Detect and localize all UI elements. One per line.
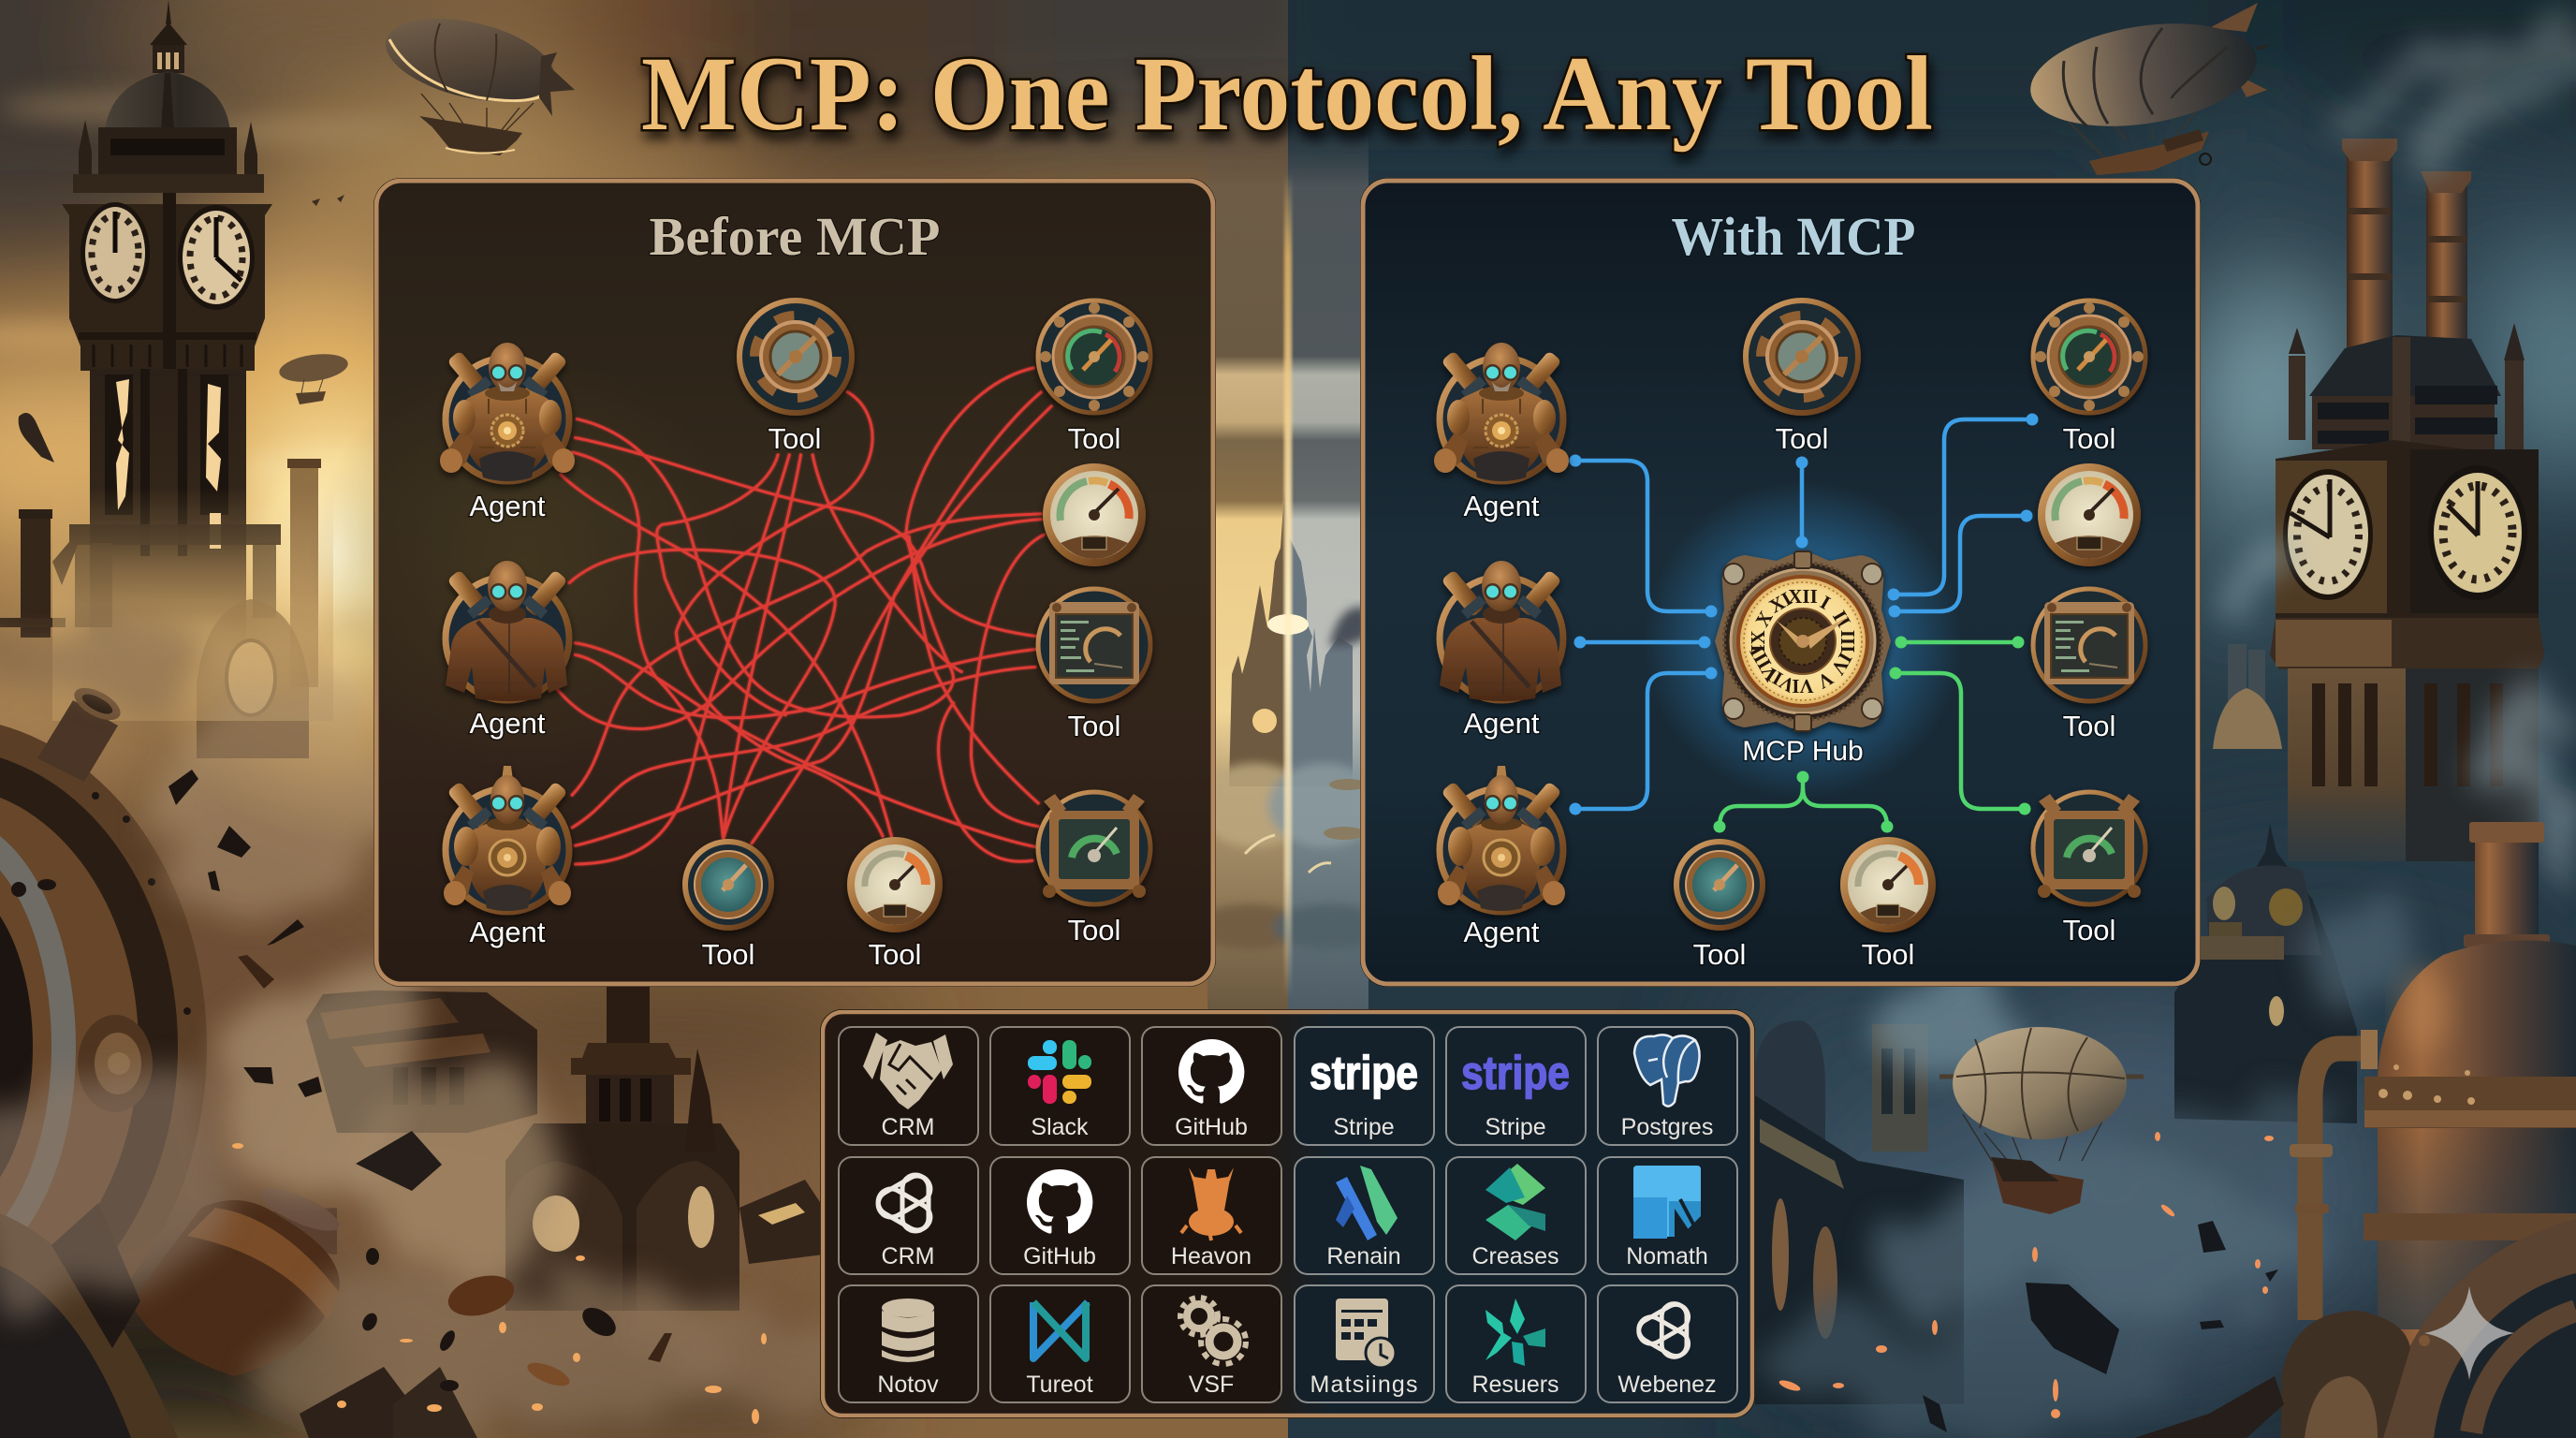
label: CRM	[882, 1114, 934, 1140]
agent icon 1	[1434, 343, 1569, 481]
MCP hub clock: XII	[1788, 585, 1818, 608]
tool label: Tool	[2063, 710, 2115, 742]
tool label: Tool	[702, 938, 754, 971]
label: Creases	[1471, 1243, 1559, 1269]
icon: Tureot	[1033, 1302, 1088, 1358]
cell: VSF	[1142, 1285, 1281, 1402]
cell: GitHub	[990, 1157, 1130, 1274]
label: GitHub	[1023, 1243, 1096, 1269]
cell: Postgres	[1598, 1027, 1737, 1145]
cell: Heavon	[1142, 1157, 1281, 1274]
cell: CRM knot	[839, 1157, 978, 1274]
tool label: Tool	[768, 422, 821, 455]
boiler and pipe	[2290, 822, 2576, 1438]
label: Stripe	[1485, 1114, 1546, 1140]
agent label 1: Agent	[469, 490, 546, 522]
left rusty cylinder and second wheel	[0, 1181, 344, 1438]
cell: Matsiings	[1295, 1285, 1434, 1402]
label: Nomath	[1626, 1243, 1708, 1269]
cell: Stripe purple	[1446, 1027, 1586, 1145]
MCP hub clock: V	[1813, 667, 1837, 694]
cell: GitHub	[1142, 1027, 1281, 1145]
lower clock	[197, 599, 309, 758]
MCP hub clock: VIII	[1745, 642, 1783, 685]
tool icon: dark gauge	[2033, 301, 2145, 413]
cell: Nomath	[1598, 1157, 1737, 1274]
icon: Renain	[1336, 1166, 1398, 1240]
agent icon 1	[440, 343, 575, 481]
agent label 2: Agent	[1463, 707, 1540, 740]
right big clock tower	[2270, 139, 2544, 861]
tool icon: square gauge	[1038, 792, 1150, 904]
tool label: Tool	[1068, 710, 1120, 742]
right lower cityscape	[1755, 824, 2357, 1404]
cell: Notov	[839, 1285, 978, 1402]
tool label: Tool	[1068, 422, 1120, 455]
label: Postgres	[1621, 1114, 1713, 1140]
cell: Slack	[990, 1027, 1130, 1145]
panel: with MCP	[1360, 178, 2201, 987]
airship: top right	[2023, 3, 2273, 175]
icon: Resuers	[1486, 1299, 1545, 1366]
MCP hub clock: IV	[1826, 649, 1857, 679]
icon: calendar clock	[1336, 1299, 1396, 1368]
chimneys left	[0, 459, 321, 687]
agent label 3: Agent	[469, 916, 546, 948]
tool icon: teal dial	[1676, 842, 1763, 928]
cell: Creases	[1446, 1157, 1586, 1274]
watermark sparkle	[2424, 1286, 2514, 1380]
tool label: Tool	[2063, 914, 2115, 946]
cell: Resuers	[1446, 1285, 1586, 1402]
hub glow	[1644, 481, 1962, 800]
left clock tower	[0, 0, 333, 758]
label: Matsiings	[1310, 1372, 1417, 1398]
cool sky right	[1217, 0, 2576, 1438]
label: Tureot	[1026, 1372, 1093, 1398]
agent icon 3	[444, 766, 571, 912]
label: Heavon	[1171, 1243, 1251, 1269]
distant birds and debris left top	[19, 195, 344, 462]
icon: knot	[873, 1171, 935, 1235]
icon: GitHub	[1178, 1039, 1244, 1104]
small airship	[277, 350, 350, 404]
airship: lower right	[1939, 1027, 2144, 1214]
tool icon: cream gauge	[1046, 467, 1142, 563]
icon: Creases	[1486, 1164, 1545, 1240]
tool icon: terminal	[1038, 589, 1150, 701]
cell: Renain	[1295, 1157, 1434, 1274]
agent label 1: Agent	[1463, 490, 1540, 522]
icon: stripe wordmark: stripe	[1310, 1047, 1418, 1099]
label: Notov	[877, 1372, 939, 1398]
warm sky left	[0, 0, 1385, 1438]
tool icon: gear dial	[739, 301, 852, 413]
icon: Nomath	[1633, 1166, 1701, 1239]
icon: Slack	[1028, 1040, 1091, 1104]
heading: Before MCP: Before MCP	[650, 206, 940, 267]
tangled red connections	[554, 368, 1052, 864]
label: CRM	[882, 1243, 934, 1269]
icon: stripe wordmark: stripe	[1461, 1047, 1570, 1099]
cell: CRM handshake	[839, 1027, 978, 1145]
heading: With MCP: With MCP	[1672, 206, 1915, 267]
tool icon: cream dial	[851, 841, 939, 929]
icon: knot	[1634, 1300, 1693, 1360]
tool label: Tool	[869, 938, 921, 971]
label: Webenez	[1617, 1372, 1717, 1398]
MCP hub clock: III	[1837, 630, 1859, 653]
debris and embers left	[11, 770, 767, 1438]
MCP hub clock: VI	[1792, 675, 1814, 697]
right smoke plumes and low dome	[2213, 19, 2576, 899]
icon: GitHub	[1027, 1169, 1092, 1234]
icon: orange crab	[1181, 1167, 1241, 1240]
MCP hub clock: VII	[1762, 663, 1799, 697]
tool icon: terminal	[2033, 589, 2145, 701]
label: Stripe	[1333, 1114, 1395, 1140]
blue connectors	[1569, 414, 2039, 814]
distant city left lower	[306, 987, 824, 1311]
label: VSF	[1189, 1372, 1234, 1398]
MCP Hub label: MCP Hub	[1742, 736, 1864, 767]
tool icon: cream gauge	[2042, 467, 2137, 563]
lower right wheel and gear	[2134, 1219, 2576, 1438]
center strip sky with distant skyline	[1208, 140, 1368, 1009]
MCP hub clock: X	[1750, 607, 1778, 631]
icon: database	[882, 1299, 934, 1362]
smoke right	[1760, 899, 2415, 1433]
MCP hub clock: II	[1828, 607, 1855, 631]
tool icon: gear dial	[1746, 301, 1858, 413]
tool label: Tool	[2063, 422, 2115, 455]
cell: Tureot	[990, 1285, 1130, 1402]
airship: top left	[377, 4, 575, 155]
debris and embers right	[1778, 1132, 2278, 1432]
MCP hub clock: IX	[1747, 630, 1769, 653]
agent icon 2	[1440, 561, 1563, 701]
label: Renain	[1326, 1243, 1401, 1269]
icon: elephant	[1634, 1034, 1700, 1107]
label: Resuers	[1471, 1372, 1559, 1398]
icon: handshake	[863, 1033, 953, 1109]
cell: Webenez	[1598, 1285, 1737, 1402]
tool label: Tool	[1776, 422, 1828, 455]
agent label 2: Agent	[469, 707, 546, 740]
panel: integrations grid	[820, 1009, 1755, 1418]
cell: Stripe white	[1295, 1027, 1434, 1145]
green connectors	[1713, 637, 2031, 833]
icon: gears	[1180, 1298, 1246, 1364]
tool icon: cream dial	[1844, 841, 1932, 929]
tool label: Tool	[1862, 938, 1914, 971]
agent label 3: Agent	[1463, 916, 1540, 948]
title: MCP: One Protocol, Any Tool	[641, 36, 1933, 153]
MCP hub clock	[1715, 551, 1891, 731]
tool icon: dark gauge	[1038, 301, 1150, 413]
tool icon: square gauge	[2033, 792, 2145, 904]
agent icon 3	[1438, 766, 1565, 912]
left lower machinery: big wheel	[0, 682, 207, 1376]
MCP hub clock: I	[1816, 591, 1835, 614]
label: Slack	[1031, 1114, 1089, 1140]
agent icon 2	[446, 561, 569, 701]
glowing divider	[1284, 173, 1292, 997]
smoke left	[0, 618, 861, 1435]
tool label: Tool	[1068, 914, 1120, 946]
panel: before MCP	[309, 178, 1216, 987]
tool label: Tool	[1693, 938, 1746, 971]
tool icon: teal dial	[685, 842, 771, 928]
MCP hub clock: XI	[1765, 587, 1795, 618]
label: GitHub	[1175, 1114, 1248, 1140]
